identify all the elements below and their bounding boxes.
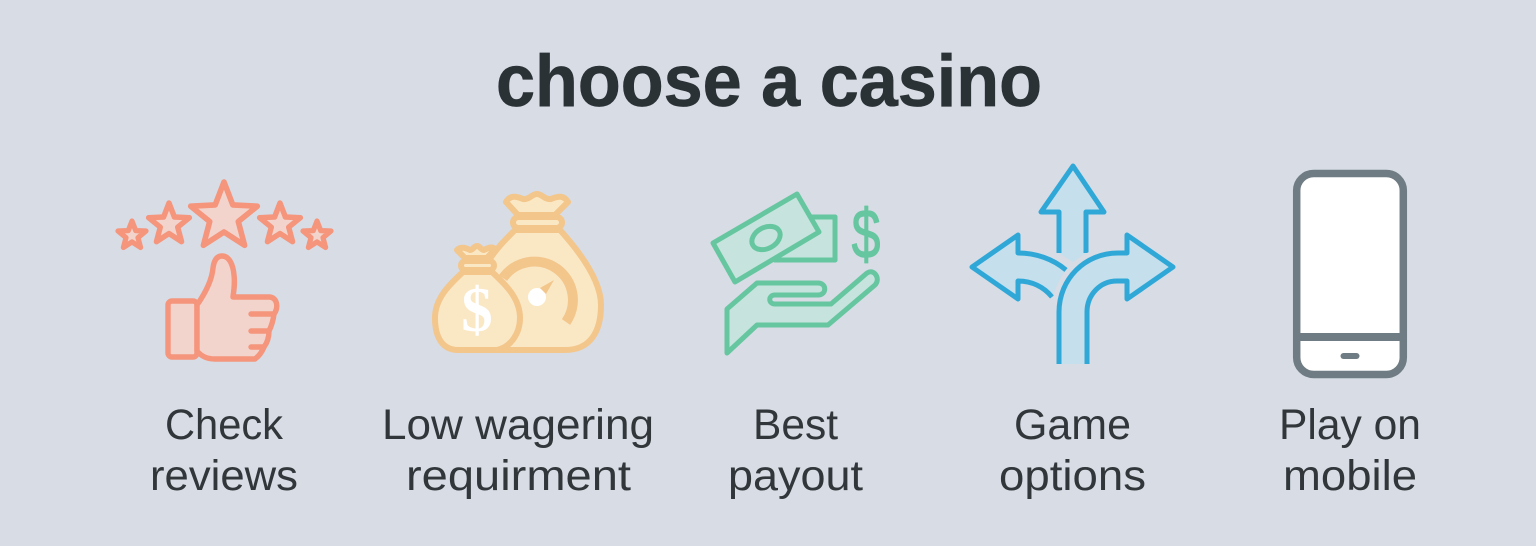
star: small left — [118, 221, 146, 248]
phone button — [1340, 353, 1360, 359]
label: low wagering requirment — [382, 401, 654, 500]
bill oval — [748, 222, 784, 254]
label: play on mobile — [1279, 401, 1421, 500]
thumb finger lines — [251, 314, 272, 347]
right arrow — [1059, 235, 1173, 364]
label: check reviews — [150, 401, 298, 500]
label: low wagering requirment: requirment — [406, 452, 631, 500]
label: best payout — [728, 401, 863, 500]
thumb hand — [197, 256, 277, 359]
left arrow — [972, 235, 1066, 299]
icon: three-way arrows — [972, 166, 1173, 364]
phone body — [1297, 174, 1403, 374]
right arrow road gap — [1059, 253, 1118, 364]
label: game options — [999, 401, 1146, 500]
back bill top — [808, 217, 835, 240]
small bag tuft — [457, 246, 495, 258]
front bill — [713, 194, 819, 282]
hand — [727, 272, 877, 353]
label: play on mobile: Play on — [1279, 401, 1421, 449]
icon: money bags with gauge — [435, 194, 601, 350]
up arrow — [1041, 166, 1104, 262]
large bag body — [488, 230, 601, 350]
back bill — [775, 217, 835, 260]
label: play on mobile: mobile — [1283, 452, 1417, 500]
large bag band — [513, 217, 562, 228]
small bag body — [435, 272, 520, 350]
large bag tuft — [506, 194, 568, 215]
label: best payout: payout — [728, 452, 863, 500]
label: best payout: Best — [753, 401, 838, 449]
label: game options: Game — [1014, 401, 1131, 449]
dollar sign on bag: $ — [461, 275, 493, 345]
small bag band — [461, 261, 494, 270]
thumb cuff — [168, 301, 197, 357]
phone divider — [1297, 333, 1403, 341]
star: large centre — [191, 182, 257, 245]
icon: hand with cash — [713, 194, 880, 353]
label: low wagering requirment: Low wagering — [382, 401, 654, 449]
icon: mobile phone — [1297, 174, 1403, 374]
star: medium right — [260, 203, 300, 242]
star: small right — [303, 221, 331, 248]
gauge dial — [528, 288, 546, 306]
gauge needle — [540, 280, 554, 294]
dollar sign: $ — [852, 195, 880, 274]
star: medium left — [149, 203, 189, 242]
label: check reviews: Check — [165, 401, 283, 449]
title: choose a casino — [496, 41, 1042, 122]
gauge arc — [503, 262, 573, 322]
icon: stars and thumbs up — [118, 182, 331, 359]
label: check reviews: reviews — [150, 452, 298, 500]
label: game options: options — [999, 452, 1146, 500]
